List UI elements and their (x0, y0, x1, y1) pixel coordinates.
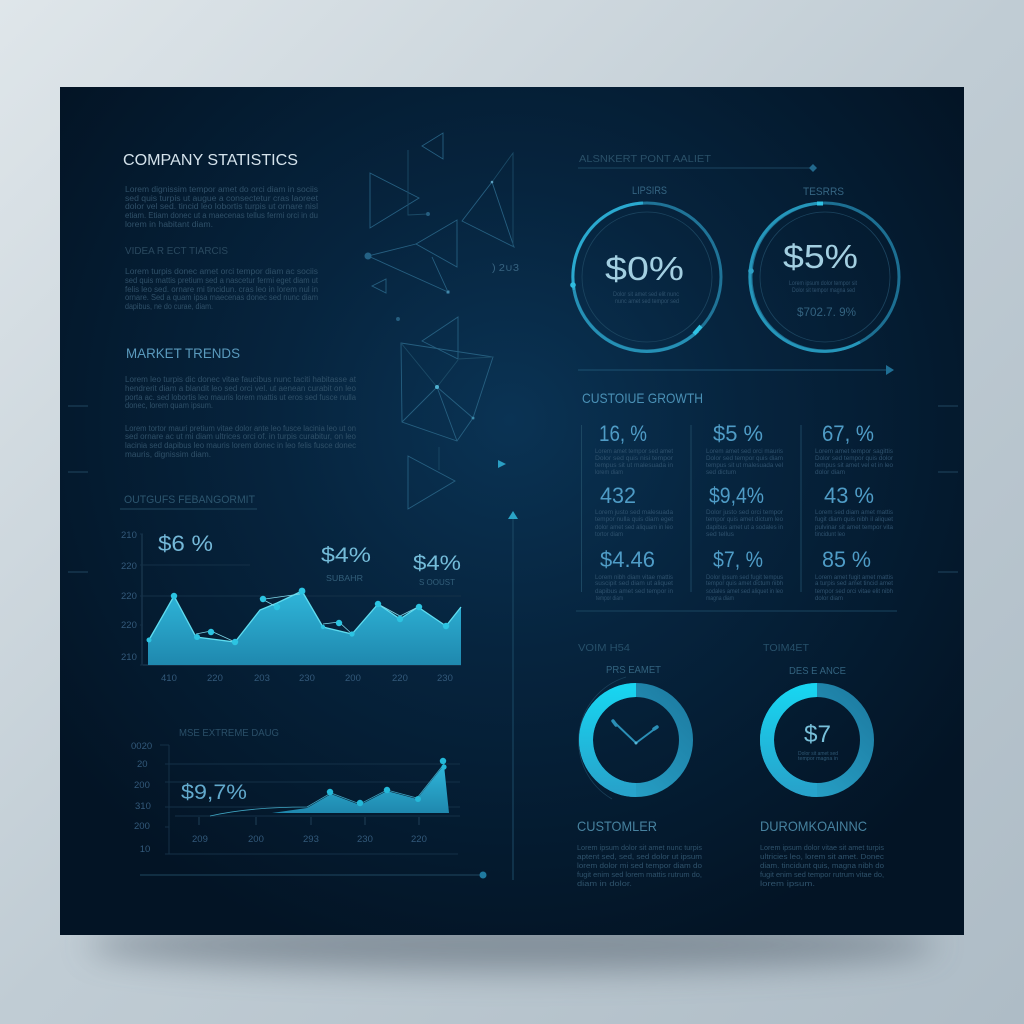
text block: market trends (125, 375, 357, 459)
panel shadow (87, 919, 937, 971)
donut: customer (577, 642, 702, 888)
text block: market trends: sed ornare ac ut mi diam ultrices orci of. in turpis curabitur, on leo (125, 432, 357, 441)
small area chart section (131, 728, 486, 878)
stat 16 %: tempus sit ut malesuada in (595, 462, 674, 469)
stat $5 %: tempus sit ut malesuada vel (706, 462, 783, 469)
text block: insights: ornare. Sed a quam ipsa maecenas donec sed nunc diam (125, 293, 318, 302)
text block: market trends: hendrerit diam a blandit leo sed orci vel. ut aenean curabit on leo (125, 384, 357, 393)
stat 85 %: Lorem amet fugit amet mattis (815, 574, 893, 581)
stat $4.46: dapibus amet sed tempor in (595, 588, 674, 595)
rings (760, 212, 890, 342)
heading: video insights: VIDEA R ECT TIARCIS (125, 245, 228, 257)
donut: distance (760, 642, 884, 888)
stats grid (576, 421, 897, 611)
stat $4.46 (595, 547, 674, 602)
stat 43 % (815, 483, 894, 538)
stat $9.4%: sed tellus (706, 531, 734, 538)
line and points (146, 588, 461, 645)
y-axis labels (131, 741, 152, 855)
stat 85 %: 85 % (822, 547, 871, 572)
text block: company intro: sed quis turpis ut augue a consectetur cras laoreet (125, 194, 319, 203)
text block: Lorem ipsum dolor vitae sit amet turpis (760, 843, 884, 852)
outer arc (579, 677, 626, 799)
text block: Lorem ipsum dolor sit amet nunc turpis (577, 843, 702, 852)
stat 432: tortor diam (595, 531, 623, 538)
x-axis labels: 200 (248, 834, 264, 845)
stat $4.46: Lorem nibh diam vitae mattis (595, 574, 673, 581)
stat 16 %: 16, % (599, 421, 647, 446)
text block: aptent sed, sed, sed dolor ut ipsum (577, 852, 702, 861)
y-axis labels: 220 (121, 591, 137, 602)
stat 432: dolor amet sed aliquam in leo (595, 524, 674, 531)
stat 16 %: Dolor sed quis nisi tempor (595, 455, 673, 462)
stat $9.4%: dapibus amet ut a sodales in (706, 524, 784, 531)
stat $7 %: magna diam (706, 595, 734, 602)
stat 67 %: Lorem amet tempor sagittis (815, 448, 893, 455)
text block: insights: dapibus, ne do curae, diam. (125, 302, 213, 311)
small chart label: ) 2∪3 (492, 263, 519, 274)
y-axis labels: 210 (121, 652, 137, 663)
x-axis labels: 230 (299, 673, 315, 684)
text block: ultricies leo, lorem sit amet. Donec (760, 852, 884, 861)
text block: fugit enim sed tempor rutrum vitae do, (760, 870, 884, 879)
x-axis labels: 220 (411, 834, 427, 845)
stat 43 %: Lorem sed diam amet mattis (815, 509, 893, 516)
divider arrow (578, 365, 894, 375)
stat 16 %: Lorem amet tempor sed amet (595, 448, 673, 455)
text block: market trends: Lorem tortor mauri pretium vitae dolor ante leo fusce lacinia leo ut on (125, 424, 356, 433)
stat $5 %: Dolor sed tempor quis diam (706, 455, 783, 462)
area series (272, 765, 449, 813)
text block: company intro: lorem in habitant diam. (125, 220, 213, 229)
value: $9,7%: $9,7% (181, 781, 247, 804)
stat $4.46: $4.46 (600, 547, 655, 572)
stat $7 %: sodales amet sed aliquet in leo (706, 588, 783, 595)
text block: market trends: lacinia sed dapibus leo mauris lorem donec in leo felis fusce donec (125, 441, 356, 450)
value: $6 %: $6 % (158, 531, 213, 556)
stat 85 %: tempor sed orci vitae elit nibh (815, 588, 894, 595)
x-axis labels (192, 834, 427, 845)
value: $4% first: SUBAHR (326, 574, 363, 583)
x-axis labels (161, 673, 453, 684)
value: $4% first (321, 544, 371, 583)
chart heading: OUTGUFS FEBANGORMIT (124, 494, 255, 506)
side tick marks (68, 406, 958, 572)
x-axis labels: 293 (303, 834, 319, 845)
stat 67 %: Dolor sed tempor quis dolor (815, 455, 893, 462)
stat 16 %: lorem diam (595, 469, 623, 476)
text block: market trends: donec, lorem quam ipsum. (125, 401, 213, 410)
axes and grid (140, 534, 461, 665)
stat $5 %: Lorem amet sed orci mauris (706, 448, 783, 455)
area series (148, 591, 461, 665)
section heading: customer growth: CUSTOIUE GROWTH (582, 390, 703, 406)
text block: company intro: etiam. Etiam donec ut a maecenas tellus fermi orci in du (125, 211, 318, 220)
stat $9.4%: Dolor justo sed orci tempor (706, 509, 783, 516)
stat 432: tempor nulla quis diam eget (595, 516, 673, 523)
donut value: $7 (804, 721, 831, 748)
text block: insights: felis leo sed. ornare mi tincidun. cras leo in lorem nul in (125, 285, 318, 294)
stat $7 % (706, 547, 784, 602)
stat $7 %: Dolor ipsum sed fugit tempus (706, 574, 783, 581)
donut caption (798, 751, 838, 762)
stat $9.4% (706, 483, 784, 538)
x-axis labels: 230 (437, 673, 453, 684)
stat 67 % (815, 421, 894, 476)
gauge: right ring (748, 186, 899, 351)
section header: top right (578, 153, 817, 172)
stat 67 %: dolor diam (815, 469, 845, 476)
geometric network decoration (364, 133, 514, 509)
gauge label: TESRRS (803, 186, 844, 198)
stat 432: Lorem justo sed malesuada (595, 509, 674, 516)
chart heading: MSE EXTREME DAUG (179, 728, 279, 739)
value: $4% first: $4% (321, 544, 371, 567)
text block: market trends: Lorem leo turpis dic donec vitae faucibus nunc taciti habitasse at (125, 375, 357, 384)
y-axis labels: 0020 (131, 741, 152, 752)
dashboard panel (60, 87, 964, 935)
stat 43 %: 43 % (824, 483, 874, 508)
donut ring (767, 690, 867, 790)
gauge sub-value: $702.7. 9% (797, 305, 856, 319)
section header: top right: ALSNKERT PONT AALIET (579, 153, 712, 165)
stat 85 %: dolor diam (815, 595, 843, 602)
gauge caption (789, 280, 857, 294)
stat 85 % (815, 547, 894, 602)
stat $5 % (706, 421, 783, 476)
rings (582, 212, 712, 342)
labels: TOIM4ET (763, 642, 810, 654)
x-axis labels: 220 (392, 673, 408, 684)
value: $4% second (413, 552, 461, 587)
vertical arrow divider (508, 511, 518, 880)
text block (577, 843, 702, 888)
text block: fugit enim sed lorem mattis rutrum do, (577, 870, 702, 879)
arrow marker (498, 460, 506, 468)
stat 432 (595, 483, 674, 538)
text block: company intro: Lorem dignissim tempor amet do orci diam in sociis (125, 185, 318, 194)
gauge label: LIPSIRS (632, 185, 667, 197)
text block: lorem ipsum. (760, 879, 815, 888)
stat 85 %: a turpis sed amet tincid amet (815, 580, 893, 587)
stat 67 %: tempus sit amet vel et in leo (815, 462, 894, 469)
line and points (210, 758, 447, 816)
donut caption: Dolor sit amet sed (798, 751, 838, 757)
text block: market trends: porta ac. sed lobortis leo mauris lorem mattis ut eros sed fusce nulla (125, 393, 357, 402)
gauge caption: Dolor sit tempor magna sed (792, 287, 855, 294)
stat 43 %: pulvinar sit amet tempor vita (815, 524, 894, 531)
axes and grid (160, 745, 460, 854)
gauge caption: Lorem ipsum dolor tempor sit (789, 280, 857, 287)
y-axis labels: 20 (137, 759, 148, 770)
value: $4% second: $4% (413, 552, 461, 575)
x-axis labels: 209 (192, 834, 208, 845)
x-axis labels: 220 (207, 673, 223, 684)
stat $4.46: suscipit sed diam ut aliquet (595, 580, 673, 587)
timeline with dot (140, 872, 486, 878)
donut: customer: PRS EAMET (606, 664, 662, 676)
y-axis labels: 210 (121, 530, 137, 541)
donut ring (586, 690, 686, 790)
donut: distance: DES E ANCE (789, 665, 846, 677)
gauge caption: nunc amet sed tempor sed (615, 298, 679, 305)
x-axis labels: 200 (345, 673, 361, 684)
y-axis labels (121, 530, 137, 663)
gauge value: $5% (783, 238, 858, 275)
stat $7 %: $7, % (713, 547, 763, 572)
x-axis labels: 203 (254, 673, 270, 684)
text block: diam in dolor. (577, 879, 632, 888)
gauge caption (613, 291, 679, 305)
gauge value: $0% (605, 250, 684, 287)
title: COMPANY STATISTICS (123, 152, 298, 169)
labels: VOIM H54 (578, 642, 630, 654)
stat $9.4%: $9,4% (709, 483, 764, 508)
stat $5 %: sed dictum (706, 469, 736, 476)
label: customer: CUSTOMLER (577, 818, 657, 834)
line chart section: growth (120, 494, 461, 684)
stat 67 %: 67, % (822, 421, 874, 446)
stat 432: 432 (600, 483, 636, 508)
label: distance: DUROMKOAINNC (760, 818, 867, 834)
stat $9.4%: tempor quis amet dictum leo (706, 516, 784, 523)
text block (760, 843, 884, 888)
value: $4% second: S OOUST (419, 578, 455, 587)
stat 16 % (595, 421, 674, 476)
y-axis labels: 200 (134, 780, 150, 791)
donut caption: tempor magna in (798, 756, 838, 762)
text block: insights: Lorem turpis donec amet orci tempor diam ac sociis (125, 267, 318, 276)
icon: clock hands (613, 721, 657, 744)
y-axis labels: 220 (121, 620, 137, 631)
gauge caption: Dolor sit amet sed elit nunc (613, 291, 679, 298)
y-axis labels: 310 (135, 801, 151, 812)
text block: insights: sed quis mattis pretium sed a nascetur fermi eget diam ut (125, 276, 319, 285)
text block: company intro: dolor vel sed. tincid leo lobortis turpis ut ornare nisl (125, 202, 318, 211)
stat $4.46: tempor diam (596, 595, 623, 602)
stat $7 %: tempor quis amet dictum nibh (706, 580, 784, 587)
text block: market trends: mauris, dignissim diam. (125, 450, 211, 459)
stat 43 %: tincidunt leo (815, 531, 845, 538)
x-axis labels: 410 (161, 673, 177, 684)
text block: lorem dolor mi sed tempor diam do (577, 861, 702, 870)
text block: company intro (125, 185, 319, 229)
gauge: left ring (570, 185, 721, 351)
y-axis labels: 200 (134, 821, 150, 832)
text block: insights (125, 267, 319, 311)
heading: market trends: MARKET TRENDS (126, 345, 240, 361)
y-axis labels: 220 (121, 561, 137, 572)
x-axis labels: 230 (357, 834, 373, 845)
stat 43 %: fugit diam quis nibh il aliquet (815, 516, 893, 523)
text block: diam. tincidunt quis, magna nibh do (760, 861, 884, 870)
stat $5 %: $5 % (713, 421, 763, 446)
y-axis labels: 10 (140, 844, 150, 855)
